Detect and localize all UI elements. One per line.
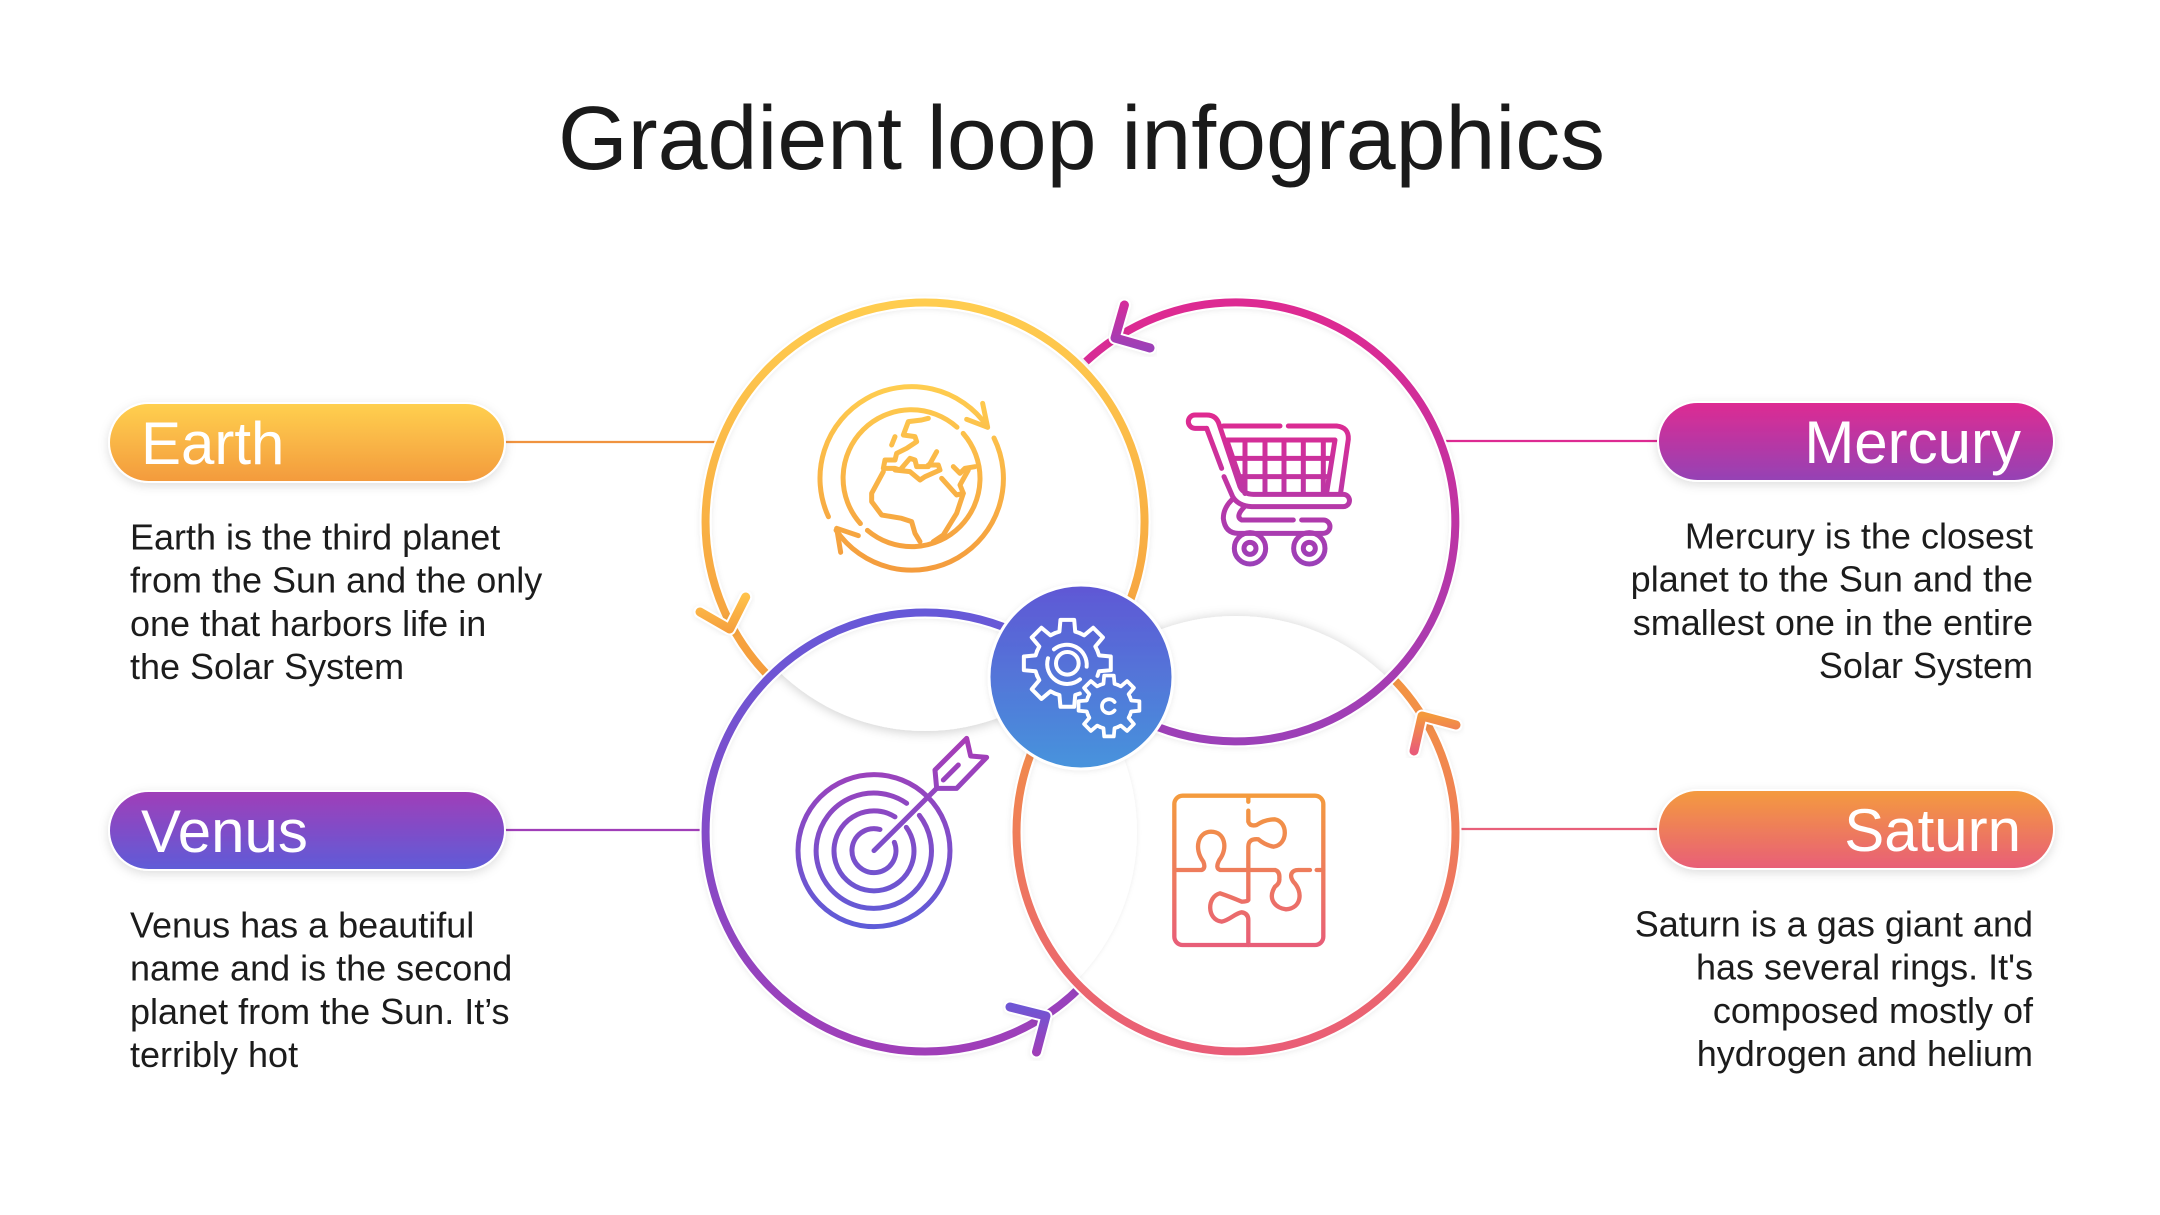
text: Saturn description: Saturn is a gas giant and — [1635, 903, 2033, 944]
pill: Venus: Venus — [141, 798, 308, 865]
text: Earth description: Earth is the third planet — [130, 516, 500, 557]
pill: Venus — [109, 791, 505, 870]
arrow: Mercury to Earth — [1115, 305, 1150, 348]
connector line: Earth — [500, 441, 716, 443]
text: Mercury description: planet to the Sun and the — [1631, 559, 2033, 600]
icon: shopping cart — [1188, 415, 1349, 564]
loop ring: Venus — [706, 612, 1080, 1052]
pill: Saturn — [1658, 790, 2054, 869]
text: Venus description: name and is the second — [130, 948, 512, 989]
panel: Mercury — [1631, 402, 2054, 686]
connector line: Venus — [500, 829, 702, 831]
loop ring: Saturn — [1016, 677, 1456, 1051]
pill: Earth — [109, 403, 505, 482]
panel: Earth — [109, 403, 542, 687]
loop ring: Earth — [706, 303, 1145, 677]
text: Mercury description: smallest one in the entire — [1633, 602, 2033, 643]
text: Venus description: Venus has a beautiful — [130, 904, 474, 945]
panel: Venus — [109, 791, 512, 1075]
connector line: Mercury — [1445, 440, 1662, 442]
pill: Mercury — [1658, 402, 2054, 481]
pill: Saturn: Saturn — [1844, 797, 2021, 864]
title: Gradient loop infographics — [558, 89, 1605, 189]
text: Earth description: from the Sun and the only — [130, 560, 542, 601]
icon: puzzle — [1174, 796, 1323, 945]
centre circle with gears icon — [989, 585, 1173, 769]
panel: Saturn — [1635, 790, 2054, 1074]
pill: Earth: Earth — [141, 410, 284, 477]
text: Saturn description: hydrogen and helium — [1697, 1033, 2033, 1074]
panel: white disc edges of the loop — [713, 313, 1452, 1048]
text: Venus description: terribly hot — [130, 1034, 298, 1075]
loop ring: Mercury — [1080, 302, 1455, 741]
icon: globe with arrows — [820, 387, 1003, 570]
icon: gears — [1024, 620, 1139, 736]
connector line: Saturn — [1459, 828, 1662, 830]
text: Earth description: the Solar System — [130, 646, 404, 687]
pill: Mercury: Mercury — [1804, 409, 2021, 476]
text: Venus description: planet from the Sun. It’s — [130, 991, 510, 1032]
arrow: Saturn to Mercury — [1414, 716, 1456, 751]
text: Saturn description: has several rings. It's — [1696, 947, 2033, 988]
text: Mercury description: Solar System — [1819, 645, 2033, 686]
text: Mercury description: Mercury is the closest — [1685, 515, 2033, 556]
text: Saturn description: composed mostly of — [1713, 990, 2034, 1031]
text: Earth description: one that harbors life in — [130, 603, 486, 644]
arrow: Earth to Venus — [700, 597, 746, 629]
arrow: Venus to Saturn — [1010, 1007, 1046, 1052]
icon: target with arrow — [798, 738, 987, 927]
